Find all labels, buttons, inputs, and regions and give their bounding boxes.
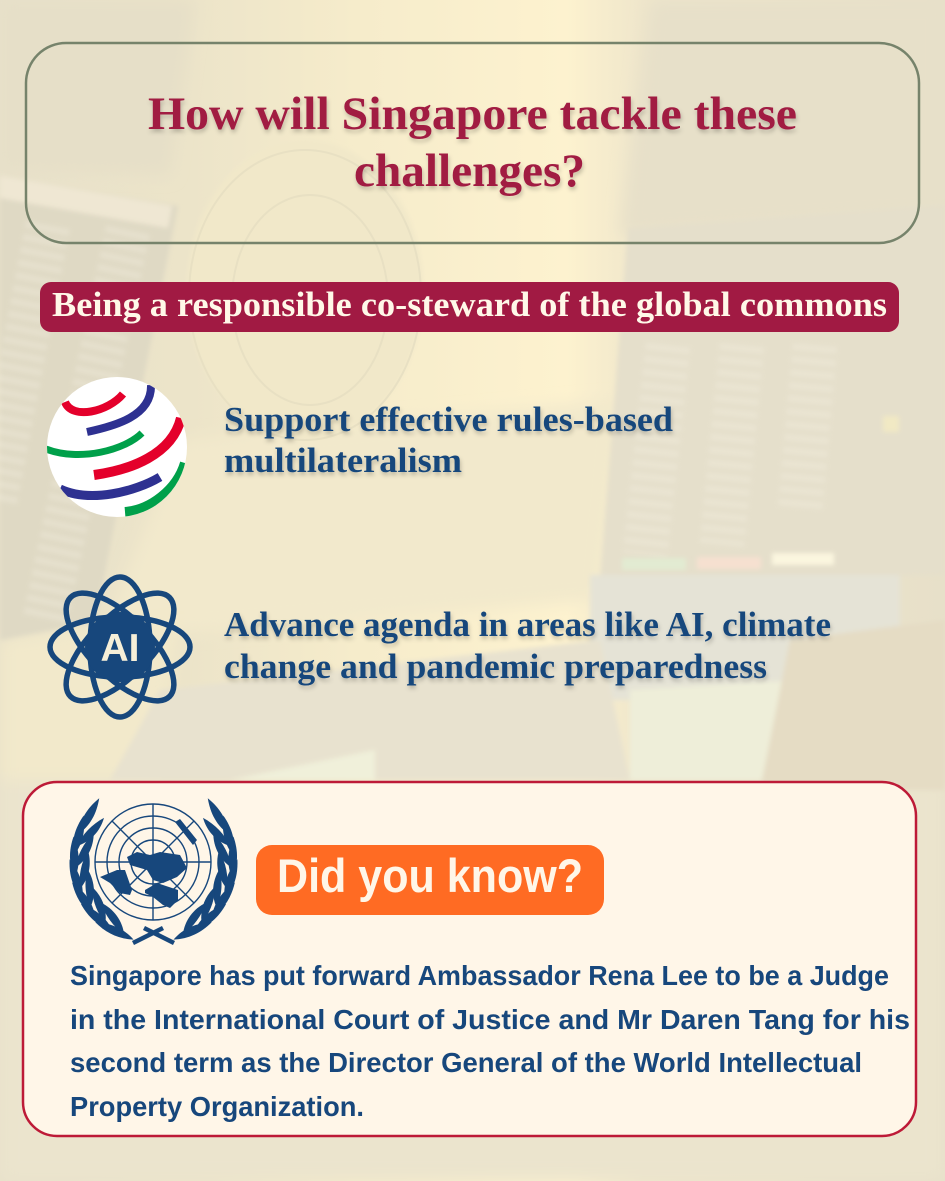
icon: AI atom (49, 576, 191, 718)
text: advance agenda: change and pandemic preparedness (224, 647, 767, 686)
body text: in the International Court of Justice and Mr Daren Tang for his (70, 1004, 910, 1035)
panel: did you know (23, 782, 916, 1136)
text: advance agenda: Advance agenda in areas like AI, climate (224, 605, 831, 644)
text: rules-based multilateralism: multilateralism (224, 441, 462, 480)
icon: UN emblem (67, 797, 240, 945)
icon: AI atom: AI (100, 627, 140, 670)
body text: second term as the Director General of the World Intellectual (70, 1047, 862, 1078)
text: rules-based multilateralism: Support effective rules-based (224, 400, 674, 439)
text: advance agenda (224, 605, 831, 686)
did you know badge: Did you know? (277, 849, 583, 902)
title: How will Singapore tackle these (148, 88, 797, 140)
subtitle banner: Being a responsible co-steward of the global commons (52, 285, 887, 324)
title (148, 88, 797, 197)
title box (26, 43, 919, 243)
body text: Singapore has put forward Ambassador Rena Lee to be a Judge (70, 960, 889, 991)
wreath (67, 797, 240, 945)
body text (70, 960, 910, 1122)
text: rules-based multilateralism (224, 400, 674, 480)
icon: WTO globe (46, 377, 187, 517)
title: challenges? (354, 145, 585, 197)
body text: Property Organization. (70, 1091, 364, 1122)
